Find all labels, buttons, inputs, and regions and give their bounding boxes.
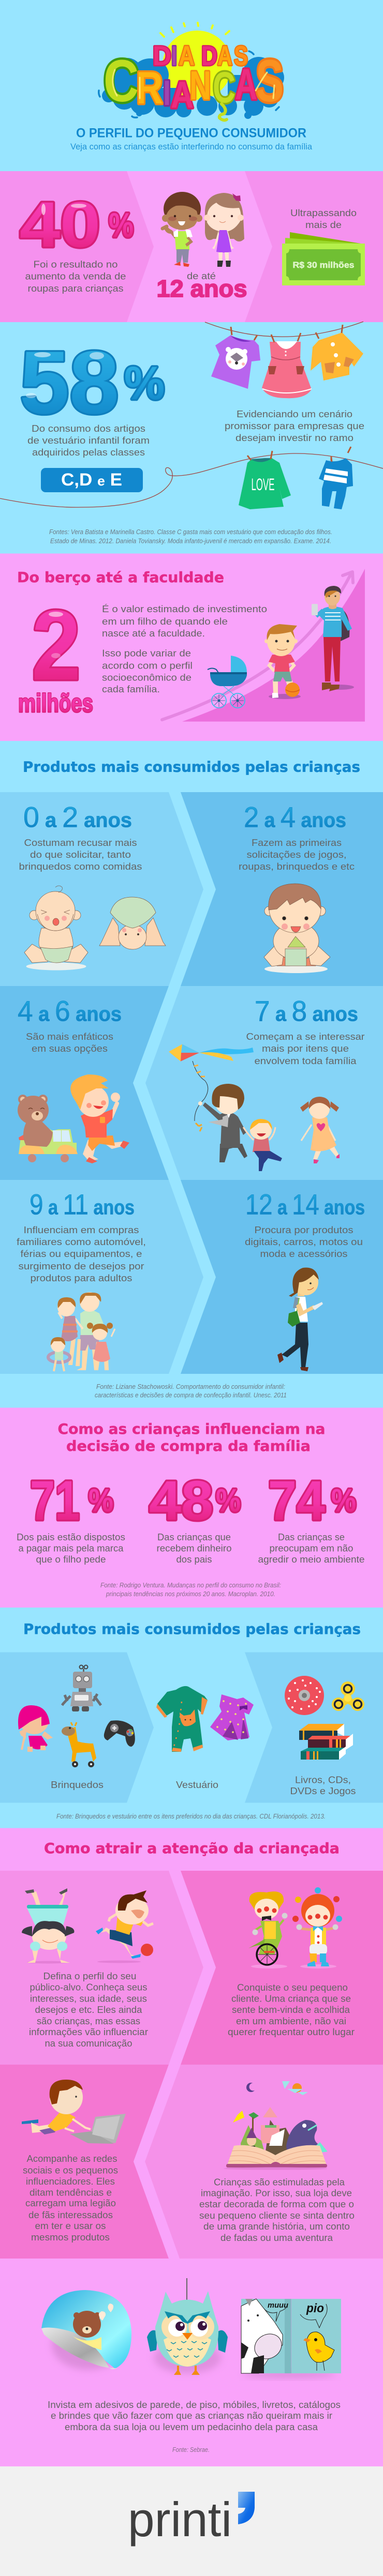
description: seu pequeno cliente se sinta dentro [199,2210,355,2221]
description: embora da sua loja ou levem um pedacinho dela para casa [65,2422,318,2432]
text block right [290,208,357,230]
text block [102,604,267,694]
description: Conquiste o seu pequeno [237,1982,348,1993]
heading: Como atrair a atenção da criançada [44,1840,340,1857]
text block: adquiridos pelas classes [32,447,145,458]
icon: logo Dia das Crianças: A [217,41,232,71]
text block right: mais de [305,220,342,230]
panel: 40% statistic [0,171,383,322]
clothesline decorations [0,322,383,507]
description: moda e acessórios [260,1249,348,1259]
panel: produtos mais consumidos [0,1620,383,1820]
description [48,2400,341,2432]
stat: 71%: Dos pais estão dispostos [17,1532,125,1542]
stat: 74%: preocupam em não [269,1543,353,1553]
icon: family of children [48,1292,115,1371]
panel: 7 a 8 anos [145,986,383,1180]
description: férias ou equipamentos, e [21,1249,142,1259]
source: Fontes: Vera Batista e Marinella Castro. Classe C gasta mais com vestuário que com educação dos filhos. [49,528,332,536]
text block: acordo com o perfil [102,661,193,671]
description: de fadas ou uma aventura [220,2233,333,2243]
text block: nasce até a faculdade. [102,628,205,639]
icon: crying baby [24,886,88,970]
text block: É o valor estimado de investimento [102,604,267,614]
description [17,1225,146,1283]
icon: blue romper [319,447,353,509]
panel: defina o perfil [0,1871,203,2065]
description [245,1225,363,1259]
source: Estado de Minas. 2012. Daniela Toviansky. Moda infanto-juvenil é mercado em expansão. Exame. 2014. [50,537,331,545]
chevron panels [0,1653,383,1802]
description: Defina o perfil do seu [43,1971,137,1981]
icon: owl mobile [147,2278,228,2375]
description: e brindes que vão fazer com que as crianças não queiram mais ir [51,2411,332,2421]
description: envolvem toda família [255,1056,357,1066]
text block [25,260,126,294]
icon: green sweater: LOVE [252,475,274,494]
stat: 71%: 71 [30,1469,80,1532]
panel: 4 a 6 anos [0,986,169,1180]
icon: logo Dia das Crianças: S [256,48,284,114]
icon: green sweater [239,451,291,509]
description [23,2154,118,2242]
description: brinquedos como comidas [19,861,142,872]
text block: aumento da venda de [25,271,126,281]
header panel [70,23,313,151]
icon: logo Dia das Crianças: D [201,41,217,71]
label: brinquedos: Brinquedos [51,1780,104,1790]
panel: 58% statistic [0,322,383,545]
description: Crianças são estimuladas pela [214,2177,345,2187]
description: familiares como automóvel, [17,1237,146,1247]
icon: CD [285,1676,324,1715]
source: Fonte: Liziane Stachowoski. Comportamento do consumidor infantil: [96,1383,285,1390]
description: estar decorada de forma com que o [199,2199,354,2209]
icon: juggling clown [292,1887,342,1968]
description: influenciadores. Eles [26,2176,115,2187]
stat: 48%: Das crianças que [157,1532,231,1542]
description [228,1982,355,2037]
description: Fazem as primeiras [252,838,342,848]
description: de fãs interessados [28,2210,113,2220]
icon: stroller [208,656,247,708]
big number 2 milhões: 2 [32,589,81,701]
label: livros, CDs, DVDs e jogos: DVDs e Jogos [290,1786,356,1796]
stat: 71%: a pagar mais pela marca [19,1543,124,1553]
heading: decisão de compra da família [66,1437,311,1454]
text block right: promissor para empresas que [225,421,364,431]
description: solicitações de jogos, [246,850,347,860]
description: de uma grande história, um conto [203,2221,350,2232]
icon: logo Dia das Crianças: N [189,63,211,108]
icon: logo Dia das Crianças: A [179,41,195,71]
description: Invista em adesivos de parede, de piso, móbiles, livretos, catálogos [48,2400,341,2410]
text block right: Ultrapassando [290,208,357,218]
description: sente bem-vinda e acolhida [232,2005,350,2015]
icon: giraffe [62,1722,96,1767]
description: ditam tendências e [30,2187,112,2198]
heading [58,1420,325,1454]
heading: Produtos mais consumidos pelas crianças [23,1620,361,1638]
icon: girl [300,1097,340,1163]
big number 40%: 40 [20,189,100,261]
badge: classes C, D e E [41,468,143,492]
description: são crianças, mas essas [37,2016,140,2026]
icon: logo Dia das Crianças: I [163,73,171,113]
icon: game controller [104,1720,135,1747]
text block: cada família. [102,684,160,694]
icon: logo Dia das Crianças: S [234,41,248,71]
icon: purple dress [210,1694,254,1740]
icon: two children [162,192,244,267]
description: cliente. Uma criança que se [231,1994,351,2004]
heading: Produtos mais consumidos pelas crianças [23,758,360,776]
source: Fonte: Rodrigo Ventura. Mudanças no perfil do consumo no Brasil: [100,1581,281,1589]
text block: Isso pode variar de [102,648,191,659]
logo: printi: printi [128,2492,232,2547]
icon: small child [243,1119,282,1171]
panel: produtos por idade [0,758,383,1399]
description: em suas opções [32,1043,108,1054]
description [26,1032,113,1054]
panel: 9 a 11 anos [0,1180,203,1374]
big number 58%: % [124,358,165,410]
description [246,1032,365,1066]
icon: green romper [156,1686,208,1752]
icon: bear sticker [41,2290,131,2370]
icon: animal booklet: pio [306,2301,324,2315]
text block: em um filho de quando ele [102,616,228,627]
age label: 7 a 8 anos [255,995,358,1027]
label: livros, CDs, DVDs e jogos: Livros, CDs, [295,1775,351,1785]
panel: conquiste [181,1871,383,2065]
icon: baby with blocks [264,884,330,973]
description: na sua comunicação [45,2038,132,2049]
description: do que solicitar, tanto [30,850,131,860]
stat: 74%: agredir o meio ambiente [258,1554,364,1565]
stat: 71%: % [89,1483,113,1519]
growth ramp [182,569,365,722]
icon: banknote [282,232,365,285]
label: livros, CDs, DVDs e jogos [290,1775,356,1796]
stat: 74%: 74 [268,1469,325,1532]
icon: girl doing handstand [22,1888,74,1964]
description: mais por itens que [262,1043,349,1054]
description: digitais, carros, motos ou [245,1237,363,1247]
icon: logo Dia das Crianças: A [235,60,257,109]
description: surgimento de desejos por [19,1261,144,1271]
age label: 4 a 6 anos [18,995,122,1027]
text block right: Evidenciando um cenário [237,409,352,419]
description: Influenciam em compras [24,1225,139,1235]
icon: books [299,1724,353,1760]
description: em ter e usar os [35,2221,106,2231]
label: de até: de até [187,271,216,281]
icon: robot [62,1665,101,1711]
icon: logo Dia das Crianças: C [104,48,139,114]
stat: 48%: recebem dinheiro [156,1543,232,1553]
age label: 2 a 4 anos [244,800,346,834]
text block right: desejam investir no ramo [235,433,353,443]
stat: 74% [258,1469,364,1565]
description: informações vão influenciar [29,2027,148,2037]
panel: do berço até a faculdade [0,553,383,741]
icon: animal booklet: muuu [268,2301,288,2310]
icon: logo Dia das Crianças: A [171,74,194,116]
icon: animal booklet [241,2299,341,2378]
stat: 48%: % [216,1483,241,1519]
stat: 71%: que o filho pede [36,1554,106,1565]
description: Costumam recusar mais [24,838,137,848]
icon: logo Dia das Crianças: D [153,41,171,71]
big number 40% [20,189,134,261]
description: público-alvo. Conheça seus [30,1982,147,1993]
age label: 0 a 2 anos [23,800,132,834]
panel: como as crianças influenciam [0,1407,383,1608]
description: querer frequentar outro lugar [228,2027,355,2037]
panel: footer [0,2466,383,2576]
icon: purple shirt [211,327,260,389]
icon: logo Dia das Crianças: R [136,62,163,113]
source [100,1581,281,1598]
icon: pink dress [262,333,312,398]
stat: 48%: 48 [149,1469,213,1532]
label: vestuário: Vestuário [176,1780,218,1790]
icon: baby bending [99,897,166,949]
age label: 9 a 11 anos [30,1188,135,1220]
text block [27,423,150,458]
icon: teddy bear on truck [18,1095,78,1162]
description: produtos para adultos [30,1273,132,1283]
panel: como atrair a atenção [0,1828,383,2466]
icon: kite [169,1044,254,1131]
badge: classes C, D e E: C,D e E [61,470,122,490]
description: imaginação. Por isso, sua loja deve [201,2188,352,2199]
source [95,1383,287,1399]
heading: Como as crianças influenciam na [58,1420,325,1437]
big number 58% [20,333,165,432]
stat: 74%: % [331,1483,356,1519]
big number 58%: 58 [20,333,119,432]
description: sociais e os pequenos [23,2165,118,2176]
icon: girl with phone [277,1267,323,1371]
description: em um ambiente, não vai [236,2016,346,2026]
panel: imaginação [145,2065,383,2259]
label: 12 anos: 12 anos [156,275,247,302]
description: interesses, sua idade, seus [30,1994,147,2004]
description [19,838,142,872]
description: Acompanhe as redes [27,2154,117,2164]
text block right [225,409,364,443]
arrow: growth [162,572,353,720]
icon: banknote: R$ 30 milhões [293,260,354,270]
description [29,1971,148,2049]
text block: Do consumo dos artigos [32,423,145,434]
source [49,528,332,545]
icon: boy with ball [264,624,301,699]
icon: yellow coat [311,325,363,381]
stat: 48% [149,1469,241,1565]
panel: 2 a 4 anos [181,792,383,986]
source: características e decisões de compra de confecção infantil. Unesc. 2011 [95,1391,287,1399]
icon: teen with phone [312,586,354,691]
icon: doll [18,1705,51,1752]
icon: boy playing ball [96,1890,153,1963]
description [239,838,355,872]
big number 2 milhões [18,589,93,718]
stat: 71% [17,1469,125,1565]
panel: redes sociais [0,2065,169,2259]
icon: fidget spinner [332,1681,364,1711]
icon: boy with laptop [22,2080,126,2144]
text block: socioeconômico de [102,672,192,683]
big number 40%: % [109,206,134,244]
big number 2 milhões: milhões [18,689,93,718]
description: mesmos produtos [31,2232,110,2242]
icon: happy boy [70,1074,129,1163]
source: Fonte: Sebrae. [172,2446,210,2453]
text block: Foi o resultado no [33,260,118,270]
description: Procura por produtos [255,1225,353,1235]
source: principais tendências nos próximos 20 anos. Macroplan. 2010. [106,1590,275,1598]
stat: 74%: Das crianças se [278,1532,345,1542]
description: Começam a se interessar [246,1032,365,1042]
description: desejos e etc. Eles ainda [35,2005,143,2015]
description: carregam uma legião [25,2198,116,2208]
panel: 12 a 14 anos [181,1180,383,1374]
icon: logo Dia das Crianças: C [213,63,235,112]
icon: unicycle clown [248,1891,288,1968]
stat: 48%: dos pais [176,1554,212,1565]
source: Fonte: Brinquedos e vestuário entre os itens preferidos no dia das crianças. CDL Florianópolis. 2013. [56,1812,326,1820]
description [199,2177,355,2243]
icon: open storybook [224,2081,327,2170]
title: O PERFIL DO PEQUENO CONSUMIDOR [76,126,306,141]
band decoration [134,1871,216,2259]
icon: father [198,1084,247,1162]
age label: 12 a 14 anos [245,1188,365,1220]
description: São mais enfáticos [26,1032,113,1042]
icon: logo Dia das Crianças: I [171,41,177,71]
heading: Do berço até a faculdade [17,569,224,586]
description: roupas, brinquedos e etc [239,861,355,872]
icon: logo Dia das Crianças [99,23,284,120]
text block: de vestuário infantil foram [27,435,150,446]
text block: roupas para crianças [28,283,123,294]
panel: 0 a 2 anos [0,792,203,986]
subtitle: Veja como as crianças estão interferindo no consumo da família [70,142,313,151]
